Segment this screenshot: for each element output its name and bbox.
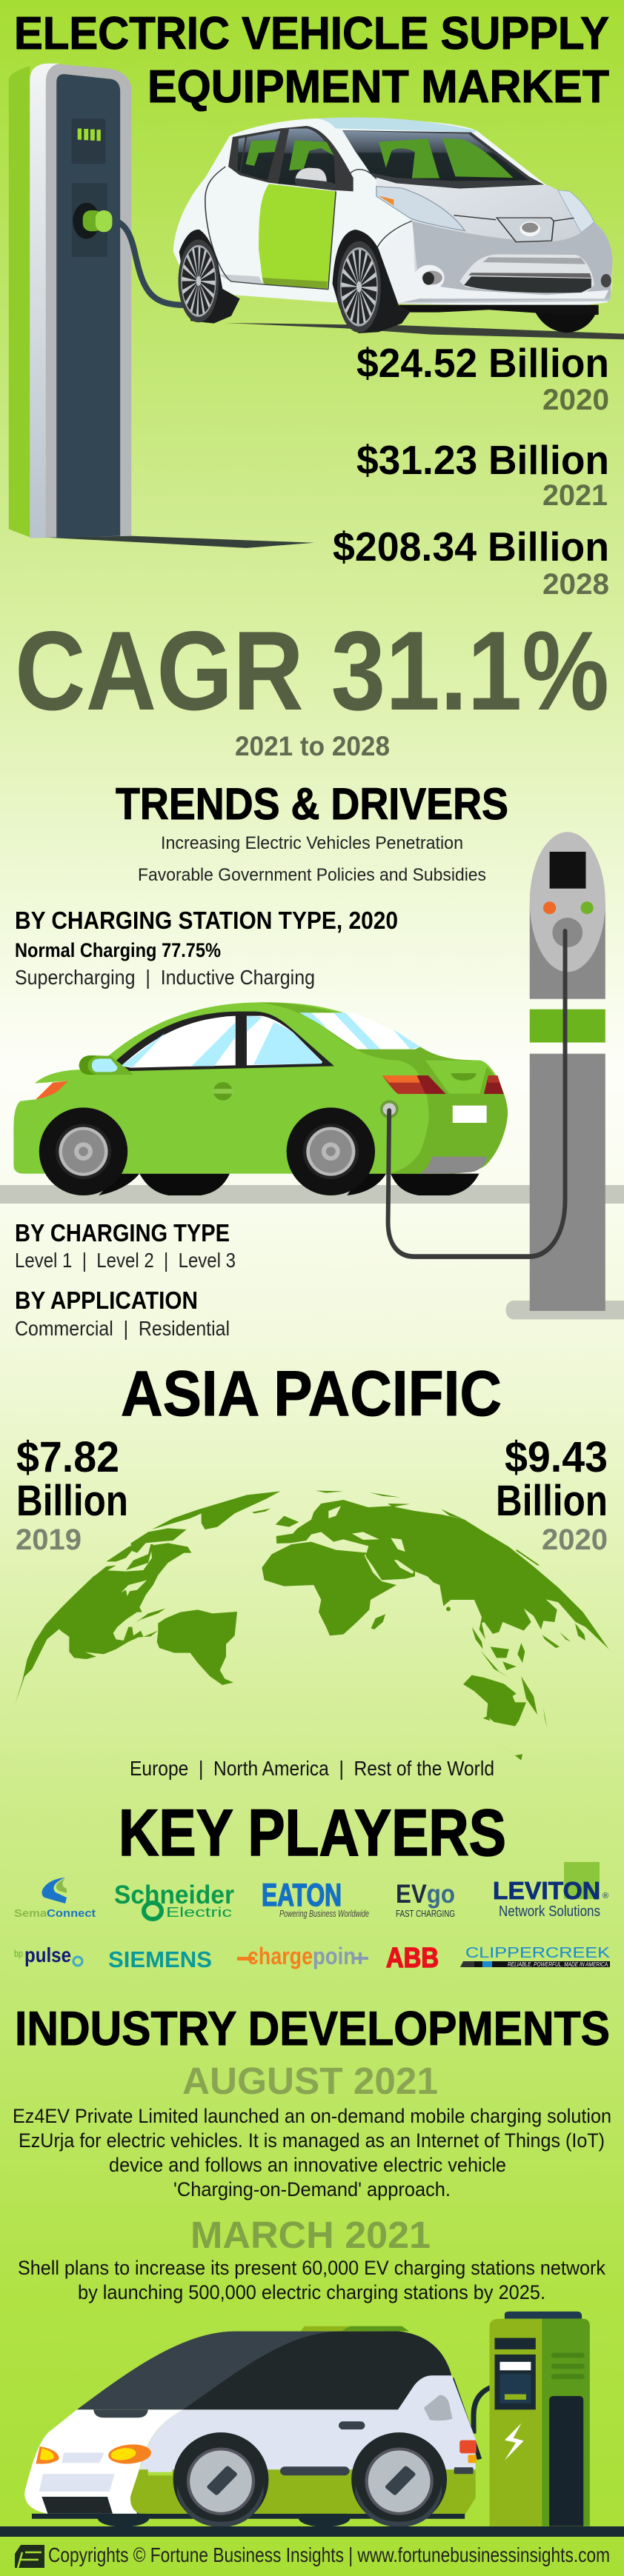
title bbox=[14, 8, 609, 113]
logo: Siemens: SIEMENS bbox=[108, 1946, 212, 1972]
heading: Asia Pacific: ASIA PACIFIC bbox=[121, 1358, 502, 1429]
title: EQUIPMENT MARKET bbox=[147, 61, 609, 113]
stat: 2019: 2019 bbox=[16, 1524, 82, 1556]
segment: charging station type: BY CHARGING STATION TYPE, 2020 bbox=[15, 907, 398, 934]
illustration: white electric car bbox=[173, 118, 624, 339]
segment: charging type: Level 1 | Level 2 | Level 3 bbox=[15, 1249, 236, 1272]
segment: application bbox=[15, 1287, 230, 1340]
year 2020: 2020 bbox=[542, 384, 609, 416]
logo: Leviton: ® bbox=[603, 1892, 608, 1901]
logo: ChargePoint bbox=[237, 1943, 368, 1969]
logo: ChargePoint: poin bbox=[313, 1943, 356, 1969]
stat: 2020 bbox=[496, 1433, 608, 1556]
value 2028: $208.34 Billion bbox=[333, 524, 609, 570]
development: August 2021: 'Charging-on-Demand' approach. bbox=[173, 2178, 451, 2200]
stat: 2020: $9.43 bbox=[505, 1433, 608, 1481]
value 2020: $24.52 Billion bbox=[356, 340, 609, 386]
stat: 2019 bbox=[16, 1433, 128, 1556]
segment: application: BY APPLICATION bbox=[15, 1287, 198, 1314]
illustration: charging station bbox=[474, 2312, 590, 2526]
other regions: Europe | North America | Rest of the World bbox=[130, 1757, 494, 1780]
logo: Leviton: LEVITON bbox=[493, 1877, 600, 1904]
market values and years bbox=[333, 340, 609, 601]
illustration: compact electric car bbox=[24, 2326, 479, 2527]
development: August 2021: device and follows an innovative electric vehicle bbox=[109, 2154, 506, 2176]
stat: 2020: 2020 bbox=[542, 1524, 608, 1556]
logo: Eaton: Powering Business Worldwide bbox=[279, 1908, 369, 1919]
logo: SemaConnect: Sema Connect bbox=[14, 1907, 96, 1920]
segment: charging type bbox=[15, 1219, 236, 1272]
logo: Leviton: Network Solutions bbox=[499, 1903, 600, 1920]
road band bbox=[0, 1185, 624, 1204]
segment: charging type: BY CHARGING TYPE bbox=[15, 1219, 230, 1247]
illustration: green car bbox=[13, 1002, 508, 1195]
footer bbox=[15, 2543, 610, 2568]
segment: charging station type bbox=[15, 907, 398, 989]
segment: charging station type: Normal Charging 77.75% bbox=[15, 939, 221, 961]
logo: Schneider Electric: Electric bbox=[166, 1905, 232, 1920]
ground strip bbox=[0, 2526, 624, 2537]
development: March 2021: MARCH 2021 bbox=[190, 2214, 431, 2256]
segment: application: Commercial | Residential bbox=[15, 1317, 230, 1340]
driver 2: Favorable Government Policies and Subsidies bbox=[138, 865, 486, 885]
map: world globe bbox=[15, 1491, 609, 1761]
heading: key players: KEY PLAYERS bbox=[119, 1795, 506, 1869]
development: August 2021: AUGUST 2021 bbox=[182, 2060, 438, 2102]
development: March 2021: by launching 500,000 electric charging stations by 2025. bbox=[78, 2281, 545, 2303]
logo: SemaConnect bbox=[14, 1878, 96, 1920]
stat: 2019: Billion bbox=[16, 1477, 128, 1525]
logo: EVgo: EVgo bbox=[396, 1880, 455, 1909]
stat: 2019: $7.82 bbox=[16, 1433, 119, 1481]
development: March 2021 bbox=[18, 2214, 605, 2303]
logo: ABB: ABB bbox=[386, 1943, 439, 1974]
illustration: EV charging pillar bbox=[9, 64, 314, 548]
logo: Leviton bbox=[493, 1862, 608, 1920]
logo: bp pulse: pulse bbox=[24, 1943, 71, 1966]
logo: Eaton: EATON bbox=[262, 1878, 342, 1913]
logo: Schneider Electric: Schneider bbox=[114, 1881, 234, 1909]
icon: Fortune Business Insights logo bbox=[15, 2545, 44, 2568]
illustration: roadside charging post bbox=[388, 832, 624, 1319]
year 2028: 2028 bbox=[542, 568, 609, 601]
logo: ChargePoint: charge bbox=[248, 1943, 313, 1969]
CAGR period: 2021 to 2028 bbox=[235, 731, 390, 761]
logo: ClipperCreek bbox=[460, 1945, 611, 1968]
development: August 2021 bbox=[13, 2060, 611, 2200]
heading: trends and drivers: TRENDS & DRIVERS bbox=[116, 779, 508, 829]
stat: 2020: Billion bbox=[496, 1477, 608, 1525]
segment: charging station type: Supercharging | Inductive Charging bbox=[15, 966, 315, 989]
logo: ClipperCreek: CLIPPERCREEK bbox=[465, 1945, 611, 1961]
value 2021: $31.23 Billion bbox=[356, 437, 609, 483]
logo: bp pulse: bp bbox=[14, 1948, 23, 1959]
year 2021: 2021 bbox=[542, 479, 608, 512]
driver 1: Increasing Electric Vehicles Penetration bbox=[161, 833, 463, 853]
logo: EVgo: FAST CHARGING bbox=[396, 1908, 455, 1919]
